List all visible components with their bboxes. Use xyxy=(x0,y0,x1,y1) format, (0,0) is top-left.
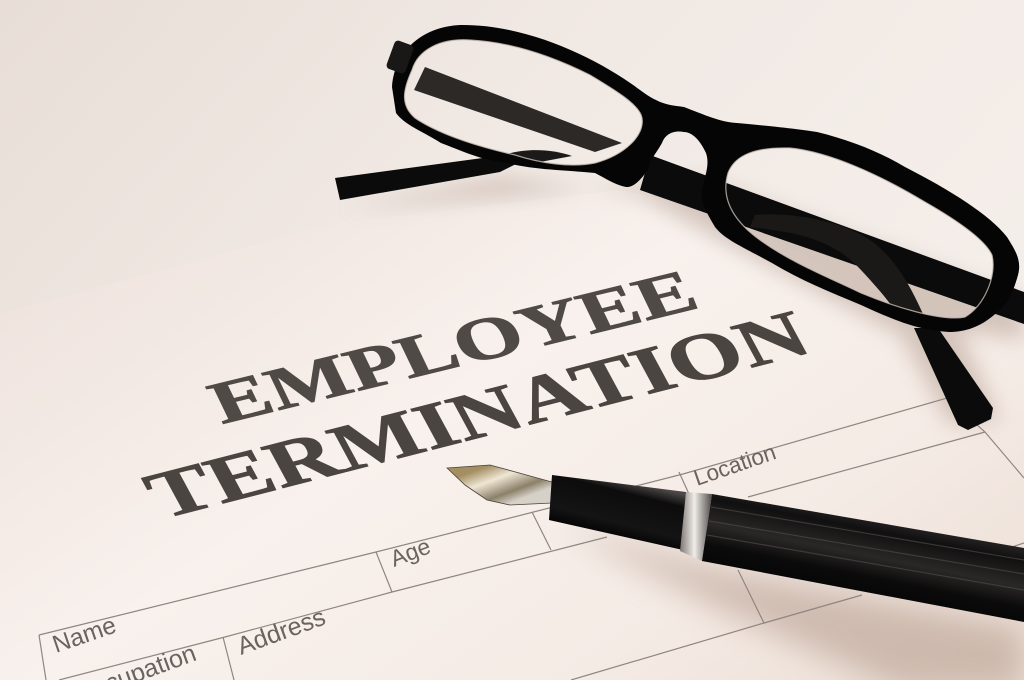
near temple arm tip xyxy=(914,328,993,430)
frame xyxy=(392,25,1019,332)
heading: EMPLOYEE: EMPLOYEE xyxy=(198,258,708,437)
pen grip xyxy=(549,475,686,550)
pen ring xyxy=(680,492,712,561)
pen barrel xyxy=(702,494,1024,622)
far temple arm xyxy=(640,155,1024,324)
pen nib xyxy=(447,465,552,505)
form label: Location: Location xyxy=(690,439,779,491)
form label: Name: Name xyxy=(49,612,120,659)
near temple arm inside right lens xyxy=(750,214,923,314)
paper sheet xyxy=(0,190,1024,680)
temple shadow in left lens xyxy=(498,150,572,162)
icon: fountain pen xyxy=(447,465,1024,622)
temple seen through left lens xyxy=(414,67,622,152)
shadow under glasses xyxy=(345,178,1024,425)
form label: Age: Age xyxy=(386,533,434,572)
left hinge xyxy=(385,39,415,75)
left temple arm xyxy=(335,157,520,200)
shadow under pen xyxy=(560,525,1024,680)
barrel grooves xyxy=(707,507,1024,590)
heading: TERMINATION: TERMINATION xyxy=(132,296,822,532)
form table lines xyxy=(39,398,1024,680)
form label: Address: Address xyxy=(233,603,329,661)
icon: reading glasses xyxy=(335,25,1024,430)
lens rim highlights xyxy=(404,40,993,318)
